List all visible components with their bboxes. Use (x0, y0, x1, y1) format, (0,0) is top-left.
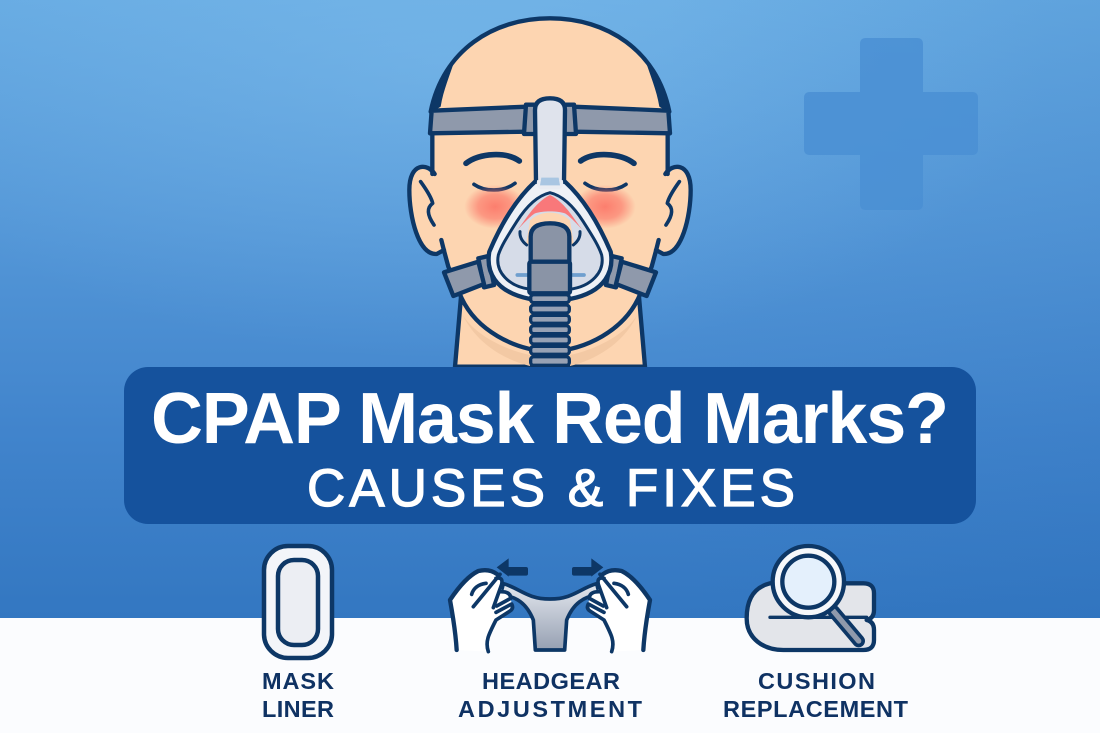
subtitle: CAUSES & FIXES (307, 459, 795, 518)
icon: medical cross (804, 38, 978, 210)
icon: headgear adjustment (450, 558, 650, 652)
head outline (430, 18, 670, 352)
headgear strap (501, 584, 599, 650)
neck (455, 297, 645, 367)
icon: cushion with magnifier (747, 546, 874, 650)
side straps (444, 256, 656, 296)
cushion (747, 583, 874, 650)
label: mask liner: LINER (262, 696, 334, 722)
ear: left (409, 167, 444, 254)
right hand (587, 570, 650, 652)
arrows (497, 558, 603, 577)
label: cushion replacement: CUSHION (758, 668, 875, 694)
illustration: face with CPAP mask (409, 18, 691, 367)
headband (430, 105, 670, 134)
label: headgear adjustment: ADJUSTMENT (458, 696, 643, 722)
red marks: cheeks (464, 185, 636, 229)
title panel (124, 367, 976, 524)
ear: right (656, 167, 691, 254)
label: mask liner: MASK (262, 668, 334, 694)
label: headgear adjustment: HEADGEAR (482, 668, 620, 694)
head and ears fill (409, 18, 691, 352)
label: cushion replacement: REPLACEMENT (723, 696, 909, 722)
eyebrows and eyes (466, 155, 634, 190)
icon: mask liner (264, 546, 332, 658)
label: mask liner (262, 668, 334, 722)
forehead support (535, 98, 565, 189)
label: headgear adjustment (458, 668, 643, 722)
title: CPAP Mask Red Marks? (151, 379, 949, 459)
left hand (450, 570, 513, 652)
air tube (529, 223, 570, 365)
label: cushion replacement (723, 668, 909, 722)
magnifier (773, 546, 859, 641)
mask (489, 182, 611, 299)
